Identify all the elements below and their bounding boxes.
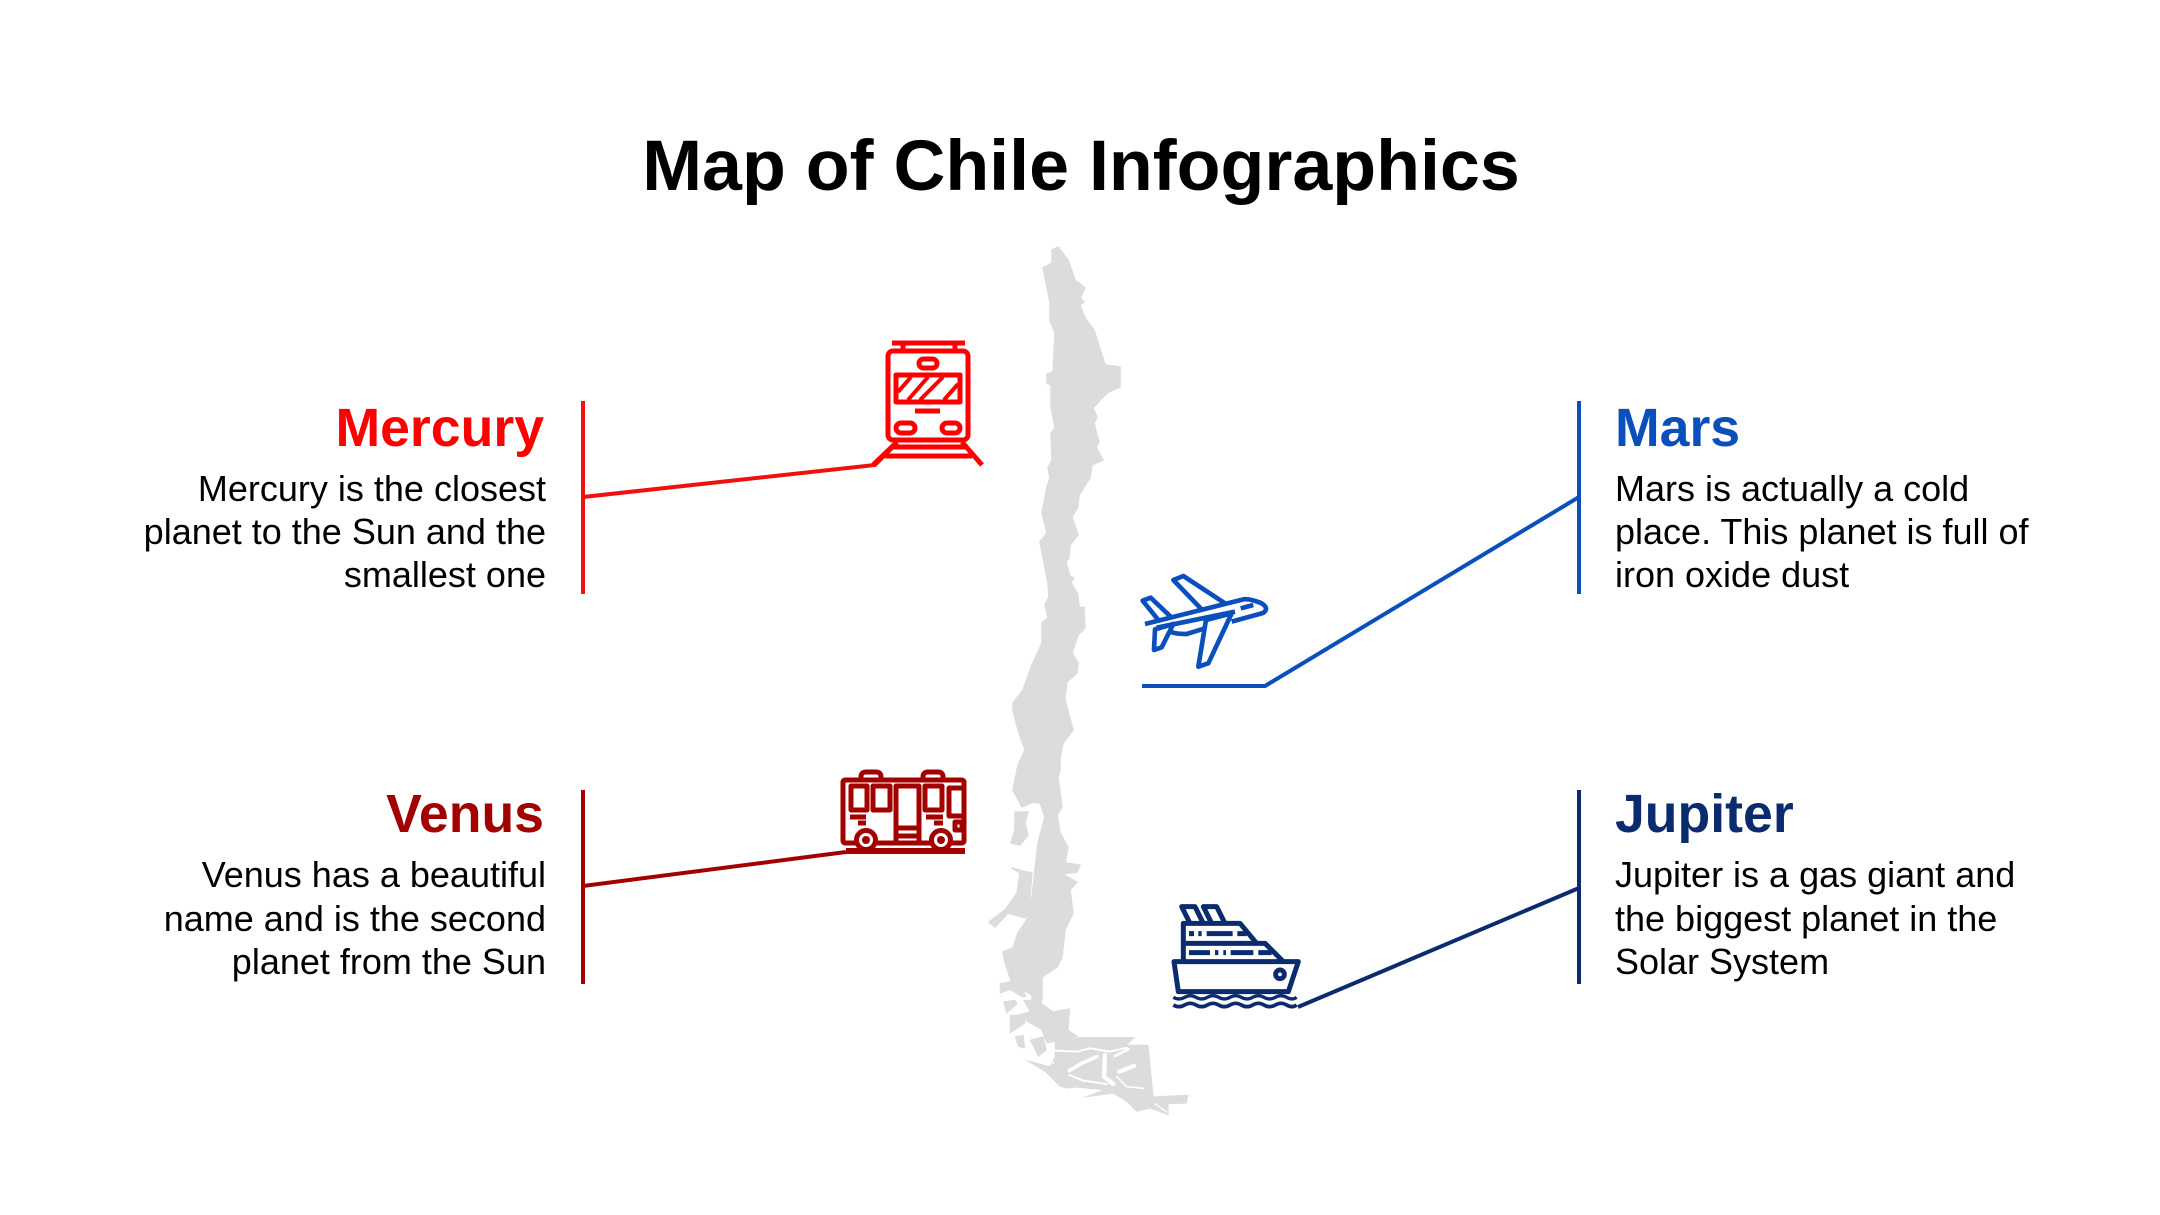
connector: Mars	[1142, 401, 1579, 686]
panel: Jupiter	[1173, 784, 2015, 1007]
text block: Venus: name and is the second	[164, 898, 546, 939]
icon: train	[873, 343, 982, 465]
text block: Mars: iron oxide dust	[1615, 554, 1849, 595]
map of Chile	[989, 247, 1188, 1115]
heading: Mars: Mars	[1615, 398, 1740, 458]
heading: Mercury: Mercury	[335, 398, 544, 458]
icon: airplane	[1143, 576, 1266, 667]
icon: ship	[1173, 907, 1298, 1007]
connector: Mercury	[583, 401, 897, 594]
text block: Venus: planet from the Sun	[232, 941, 546, 982]
southern tip of Chile	[1000, 980, 1188, 1115]
text block: Jupiter: Jupiter is a gas giant and	[1615, 854, 2015, 895]
island: Wellington	[1003, 948, 1030, 997]
connector: Venus	[583, 790, 846, 984]
text block: Mercury: smallest one	[344, 554, 546, 595]
island: Chiloe	[1011, 812, 1028, 845]
heading: Jupiter: Jupiter	[1615, 784, 1794, 844]
island: Chonos archipelago	[989, 868, 1032, 927]
heading: Venus: Venus	[386, 784, 544, 844]
text block: Mars: place. This planet is full of	[1615, 511, 2030, 552]
connector: Jupiter	[1298, 790, 1579, 1007]
text block: Jupiter: the biggest planet in the	[1615, 898, 1997, 939]
panel: Mars	[1142, 398, 2030, 686]
text block: Mars: Mars is actually a cold	[1615, 468, 1969, 509]
title: Map of Chile Infographics	[642, 126, 1520, 206]
panel: Venus	[164, 772, 965, 984]
text block: Mercury: Mercury is the closest	[198, 468, 546, 509]
text block: Venus: Venus has a beautiful	[202, 854, 546, 895]
icon: bus	[843, 772, 965, 851]
text block: Mercury: planet to the Sun and the	[144, 511, 546, 552]
text block: Jupiter: Solar System	[1615, 941, 1829, 982]
panel: Mercury	[144, 343, 982, 595]
